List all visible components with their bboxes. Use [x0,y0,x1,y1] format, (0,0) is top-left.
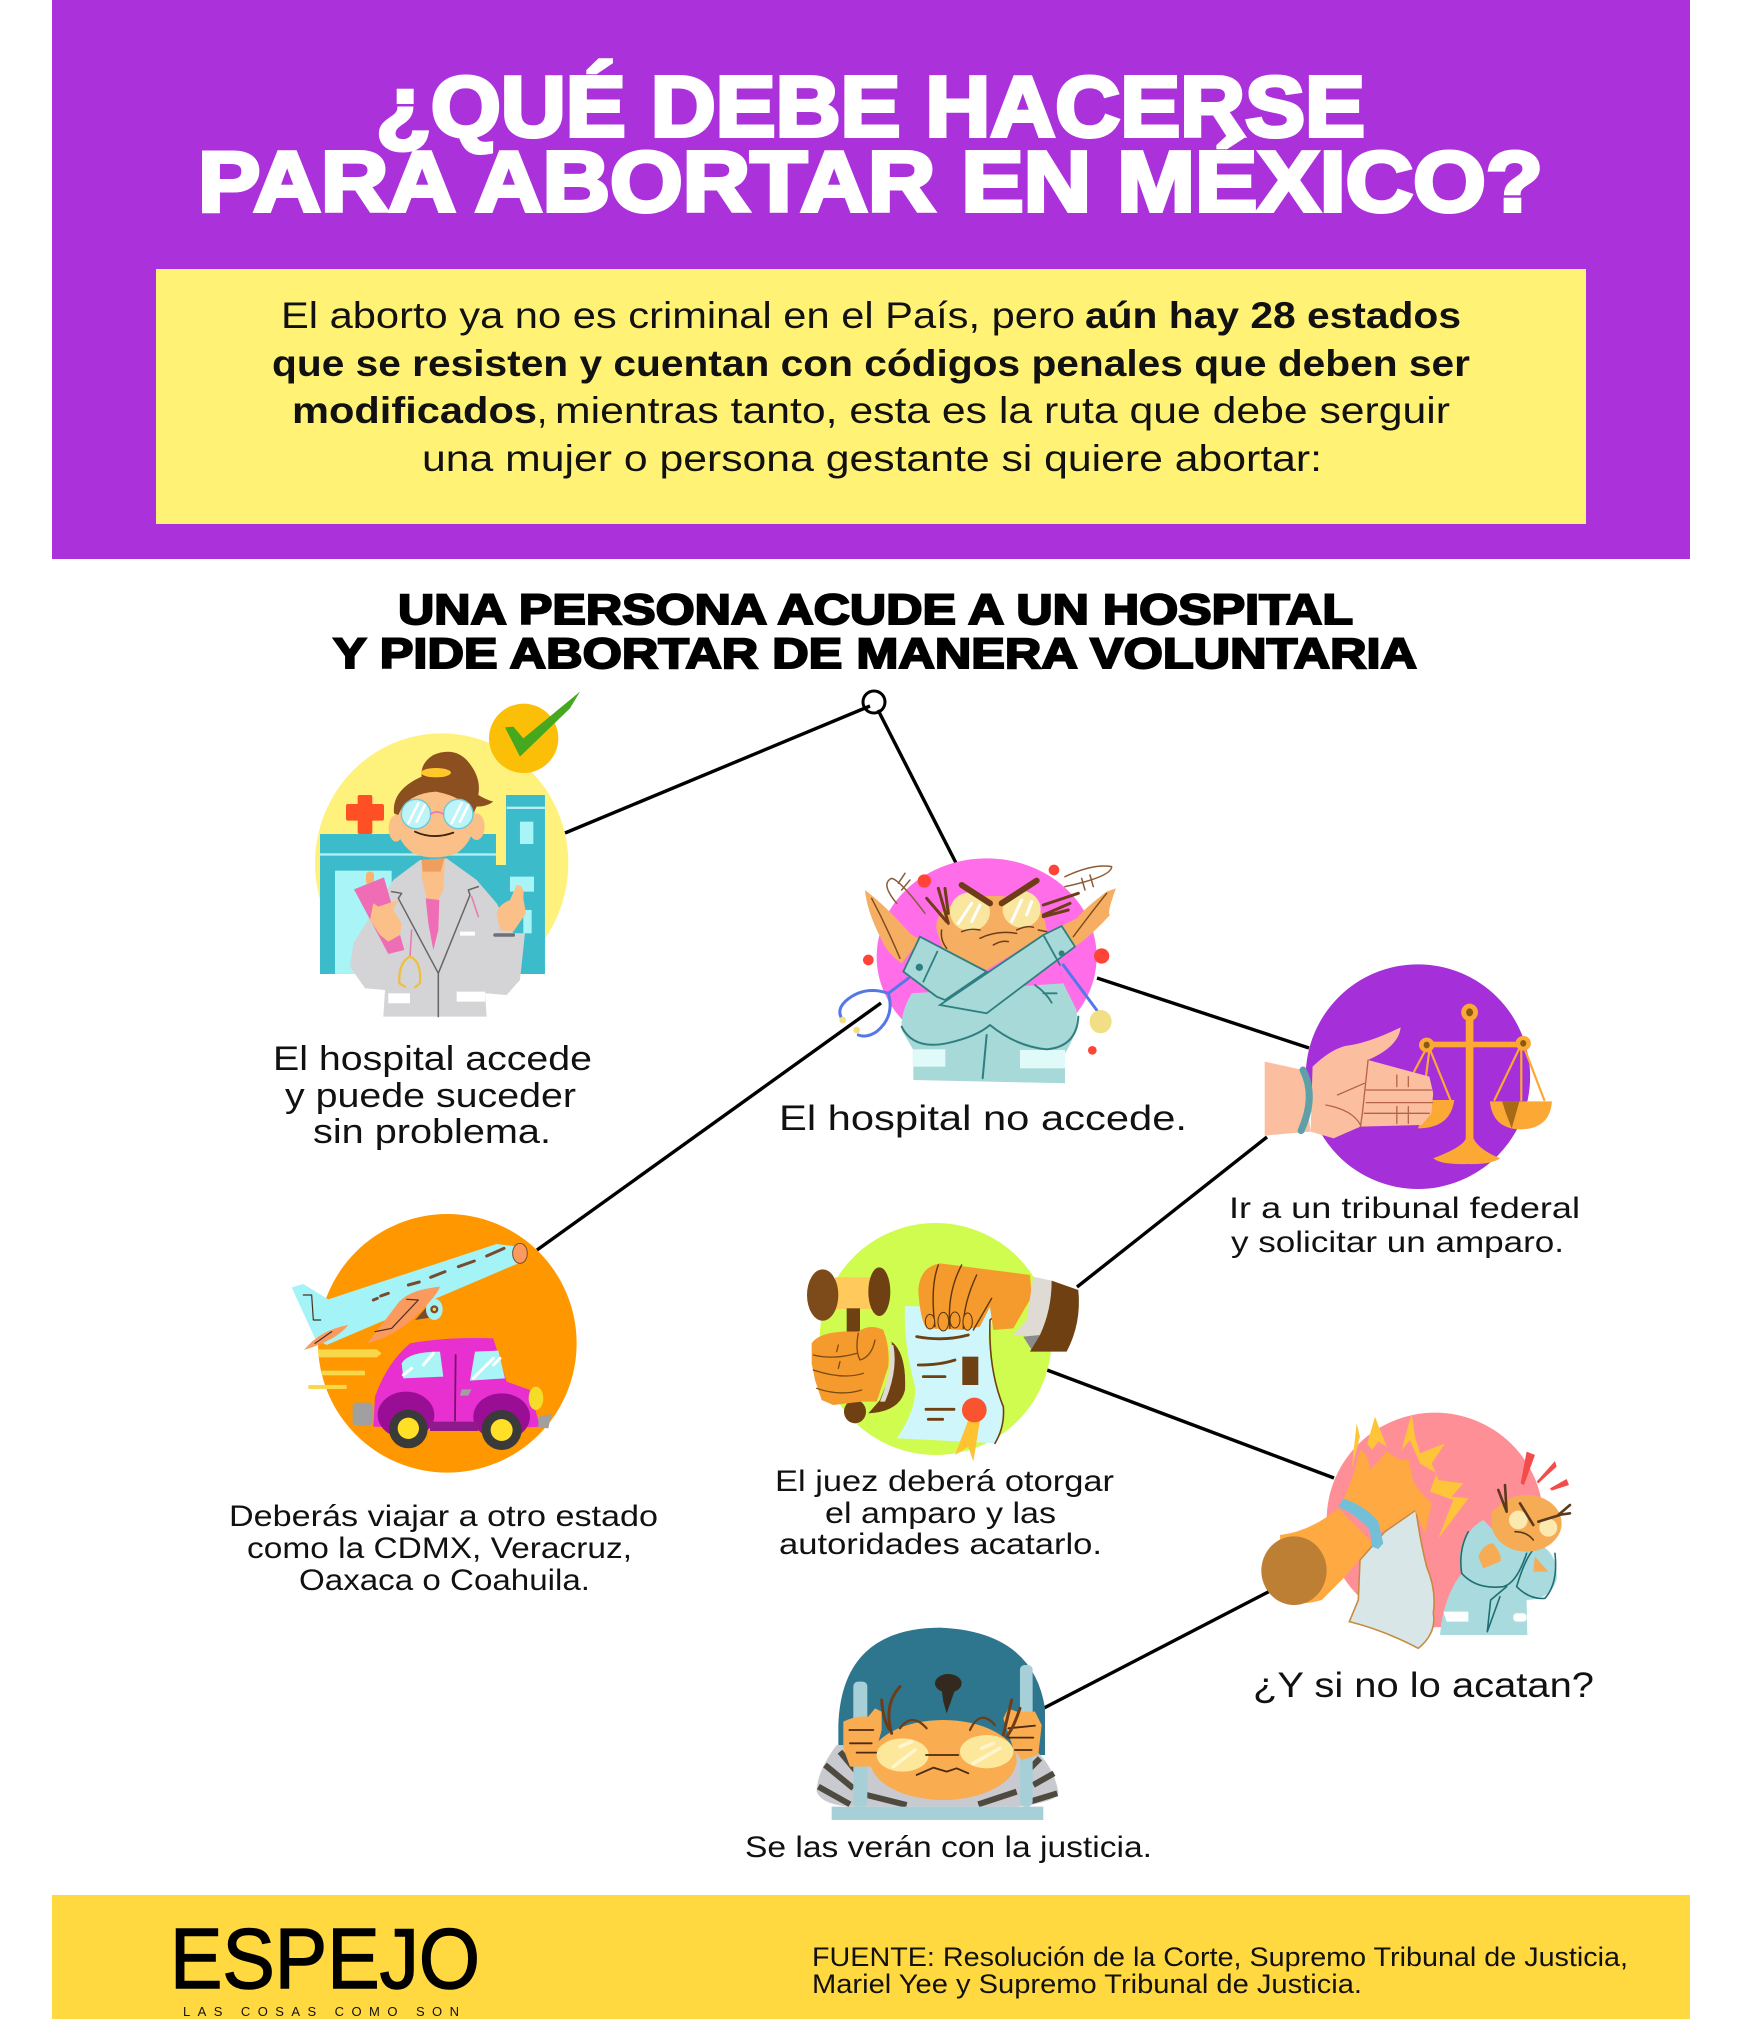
source note: FUENTE: Resolución de la Corte, Supremo Tribunal de Justicia, [812,1942,1628,1972]
label: juez otorga amparo: el amparo y las [825,1497,1056,1530]
title [198,60,1543,230]
label: tribunal federal: Ir a un tribunal federal [1229,1192,1580,1225]
intro text box: , [537,390,547,431]
label: viajar a otro estado: Oaxaca o Coahuila. [299,1564,590,1597]
purple header background [52,0,1690,559]
panel: si no lo acatan [1253,1413,1594,1705]
intro text box [156,269,1586,524]
intro text box: que se resisten y cuentan con códigos penales que deben ser [272,343,1470,384]
label: viajar a otro estado: Deberás viajar a otro estado [229,1500,658,1533]
icon: plane and car on orange circle [292,1214,577,1473]
source note: Mariel Yee y Supremo Tribunal de Justicia. [812,1969,1362,1999]
intro text box: una mujer o persona gestante si quiere abortar: [422,438,1322,479]
panel: juez otorga amparo [775,1223,1114,1561]
flow connector lines [537,691,1334,1708]
intro text box: mientras tanto, esta es la ruta que debe serguir [555,390,1450,431]
label: hospital accede: y puede suceder [285,1077,576,1115]
icon: smiling doctor in front of hospital [315,692,580,1017]
icon: person behind prison bars [817,1628,1058,1820]
panel: tribunal federal [1229,964,1580,1259]
footer panel [52,1895,1690,2019]
flow heading: UNA PERSONA ACUDE A UN HOSPITAL [398,586,1353,634]
icon: hand with scales of justice [1265,964,1552,1189]
label: se las verán con la justicia: Se las verán con la justicia. [745,1831,1152,1864]
label: juez otorga amparo [775,1465,1114,1561]
icon: gavel and document held by hands [807,1223,1079,1462]
intro text box: aún hay 28 estados [1085,295,1461,336]
intro text box: modificados [292,390,537,431]
label: hospital accede [273,1040,592,1151]
footer background [52,1895,1690,2019]
label: tribunal federal: y solicitar un amparo. [1231,1226,1564,1259]
icon: fist gripping document and angry doctor [1261,1413,1570,1648]
title: PARA ABORTAR EN MÉXICO? [198,135,1543,230]
label: viajar a otro estado: como la CDMX, Veracruz, [247,1532,632,1565]
label: tribunal federal [1229,1192,1580,1259]
label: juez otorga amparo: El juez deberá otorgar [775,1465,1114,1498]
label: hospital no accede: El hospital no accede. [779,1099,1187,1138]
source note [812,1942,1628,1999]
title: ¿QUÉ DEBE HACERSE [376,60,1365,155]
intro text box: El aborto ya no es criminal en el País, pero [281,295,1075,336]
label: hospital accede: sin problema. [313,1113,551,1151]
icon: doctor crossing arms refusing [839,858,1116,1083]
panel: hospital accede [273,692,592,1151]
label: hospital accede: El hospital accede [273,1040,592,1078]
flow heading: Y PIDE ABORTAR DE MANERA VOLUNTARIA [333,630,1417,678]
panel: se las verán con la justicia [745,1628,1152,1864]
label: viajar a otro estado [229,1500,658,1597]
flow heading [333,586,1417,678]
panel: hospital no accede [779,858,1187,1138]
label: juez otorga amparo: autoridades acatarlo. [779,1528,1102,1561]
logo: Espejo: LAS COSAS COMO SON [183,2004,459,2019]
label: si no lo acatan: ¿Y si no lo acatan? [1253,1666,1594,1705]
panel: viajar a otro estado [229,1214,658,1597]
logo: Espejo: ESPEJO [170,1912,480,2007]
header panel [52,0,1690,559]
